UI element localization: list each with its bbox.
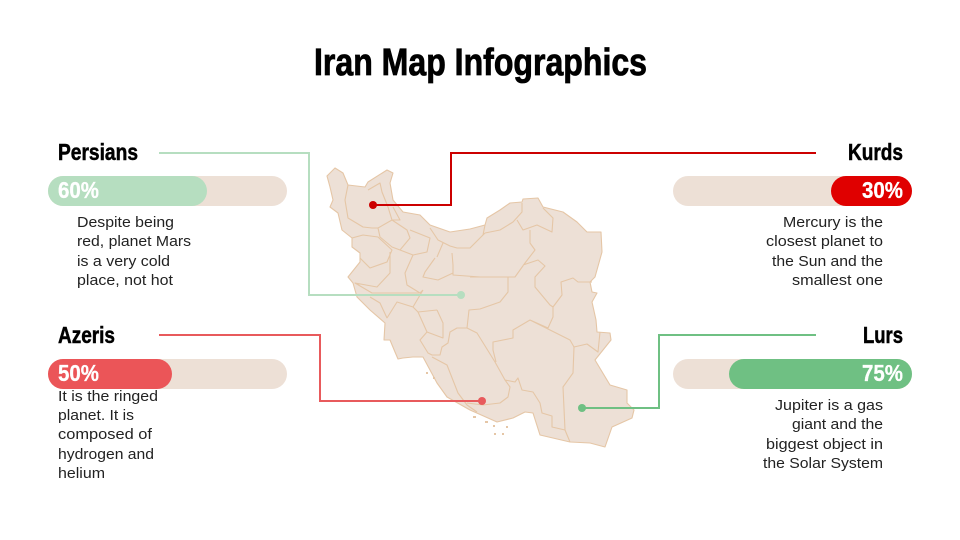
panel: Azeris: planet. It is [58, 408, 134, 424]
connector: Lurs [578, 335, 816, 412]
panel: Kurds: the Sun and the [772, 254, 883, 270]
panel: Azeris [48, 322, 287, 482]
panel: Azeris: hydrogen and [58, 447, 154, 463]
panel: Azeris: helium [58, 466, 105, 482]
panel: Azeris: It is the ringed [58, 389, 158, 405]
panel: Azeris: Azeris [58, 322, 115, 348]
panel: Kurds [673, 139, 912, 289]
panel: Lurs: 75% [862, 360, 903, 386]
panel: Lurs [673, 322, 912, 472]
connector: Azeris [159, 335, 486, 405]
panel: Kurds: smallest one [792, 273, 883, 289]
panel: Lurs: the Solar System [763, 456, 883, 472]
panel: Persians: Despite being [77, 215, 174, 231]
map of Iran [327, 168, 634, 447]
panel: Kurds: 30% [862, 177, 903, 203]
panel: Persians [48, 139, 287, 289]
connector: Kurds [369, 153, 816, 209]
panel: Azeris: 50% [58, 360, 99, 386]
panel: Lurs: giant and the [792, 417, 883, 433]
panel: Lurs: biggest object in [766, 437, 883, 453]
panel: Persians: Persians [58, 139, 138, 165]
title: Iran Map Infographics [314, 42, 647, 84]
panel: Persians: 60% [58, 177, 99, 203]
panel: Persians: red, planet Mars [77, 234, 191, 250]
panel: Persians: is a very cold [77, 254, 170, 270]
panel: Lurs: Lurs [863, 322, 903, 348]
panel: Kurds: Mercury is the [783, 215, 883, 231]
panel: Persians: place, not hot [77, 273, 173, 289]
panel: Lurs: Jupiter is a gas [775, 398, 883, 414]
panel: Kurds: Kurds [848, 139, 903, 165]
panel: Azeris: composed of [58, 427, 153, 443]
panel: Kurds: closest planet to [766, 234, 883, 250]
connector: Persians [159, 153, 465, 299]
